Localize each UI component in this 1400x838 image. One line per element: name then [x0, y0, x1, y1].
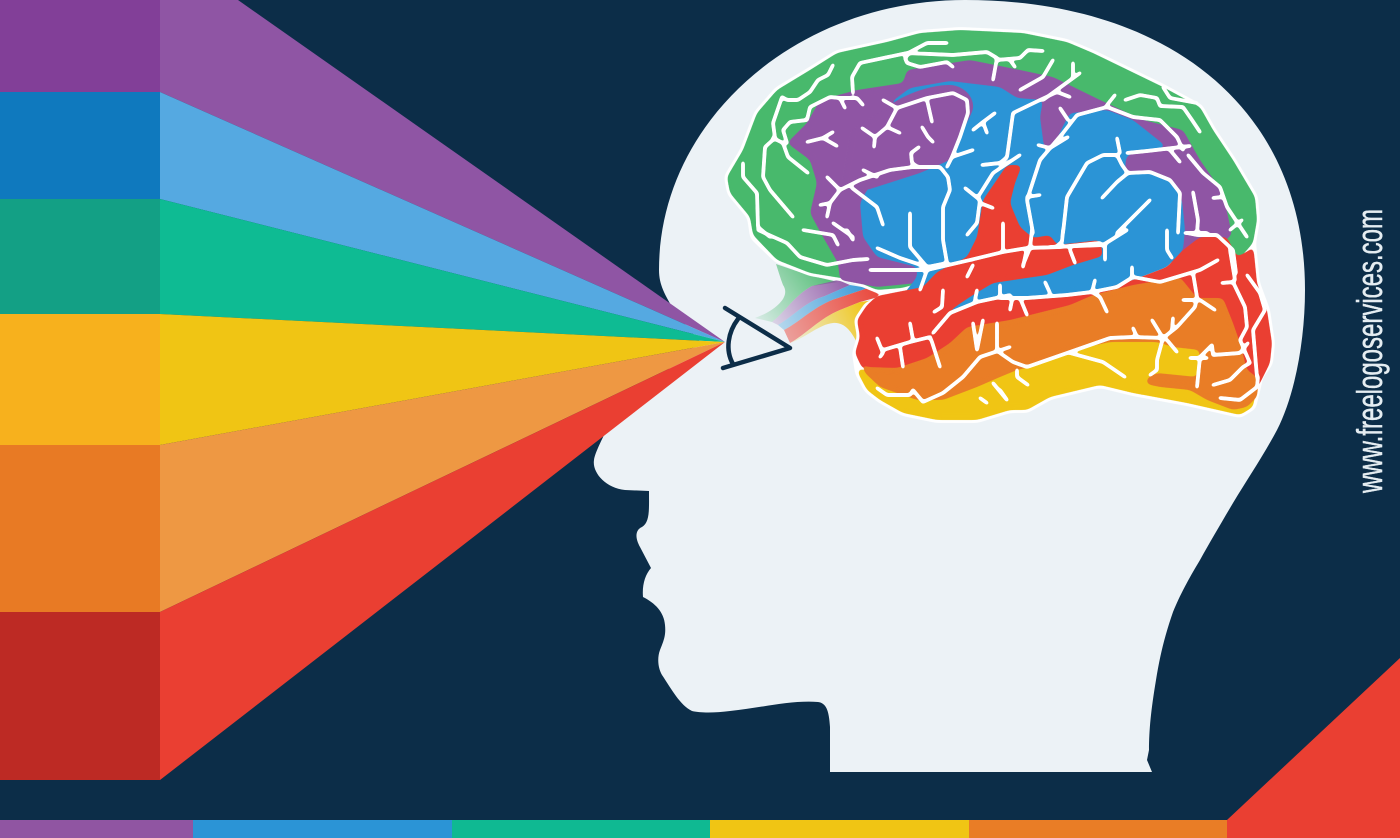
rainbow beams converging on the eye [160, 0, 725, 780]
brain white outline [727, 30, 1272, 420]
brain region: blue [860, 81, 1185, 335]
red corner triangle [1227, 658, 1400, 838]
brain region: orange [859, 277, 1258, 410]
brain region: purple frontal lobe [840, 85, 973, 190]
head silhouette [594, 0, 1305, 772]
brain region: purple [787, 60, 1232, 287]
brain region: red [855, 165, 1272, 387]
brain region: yellow [858, 330, 1257, 420]
colour strip from eye to brain [755, 264, 882, 345]
bottom colour bar [0, 820, 1227, 838]
brain folds [743, 43, 1265, 403]
website text: www.freelogoservices.com [1349, 209, 1390, 494]
icon: eye [723, 308, 790, 368]
left colour column [0, 0, 160, 780]
brain region: green [727, 30, 1257, 290]
brain [727, 30, 1272, 420]
